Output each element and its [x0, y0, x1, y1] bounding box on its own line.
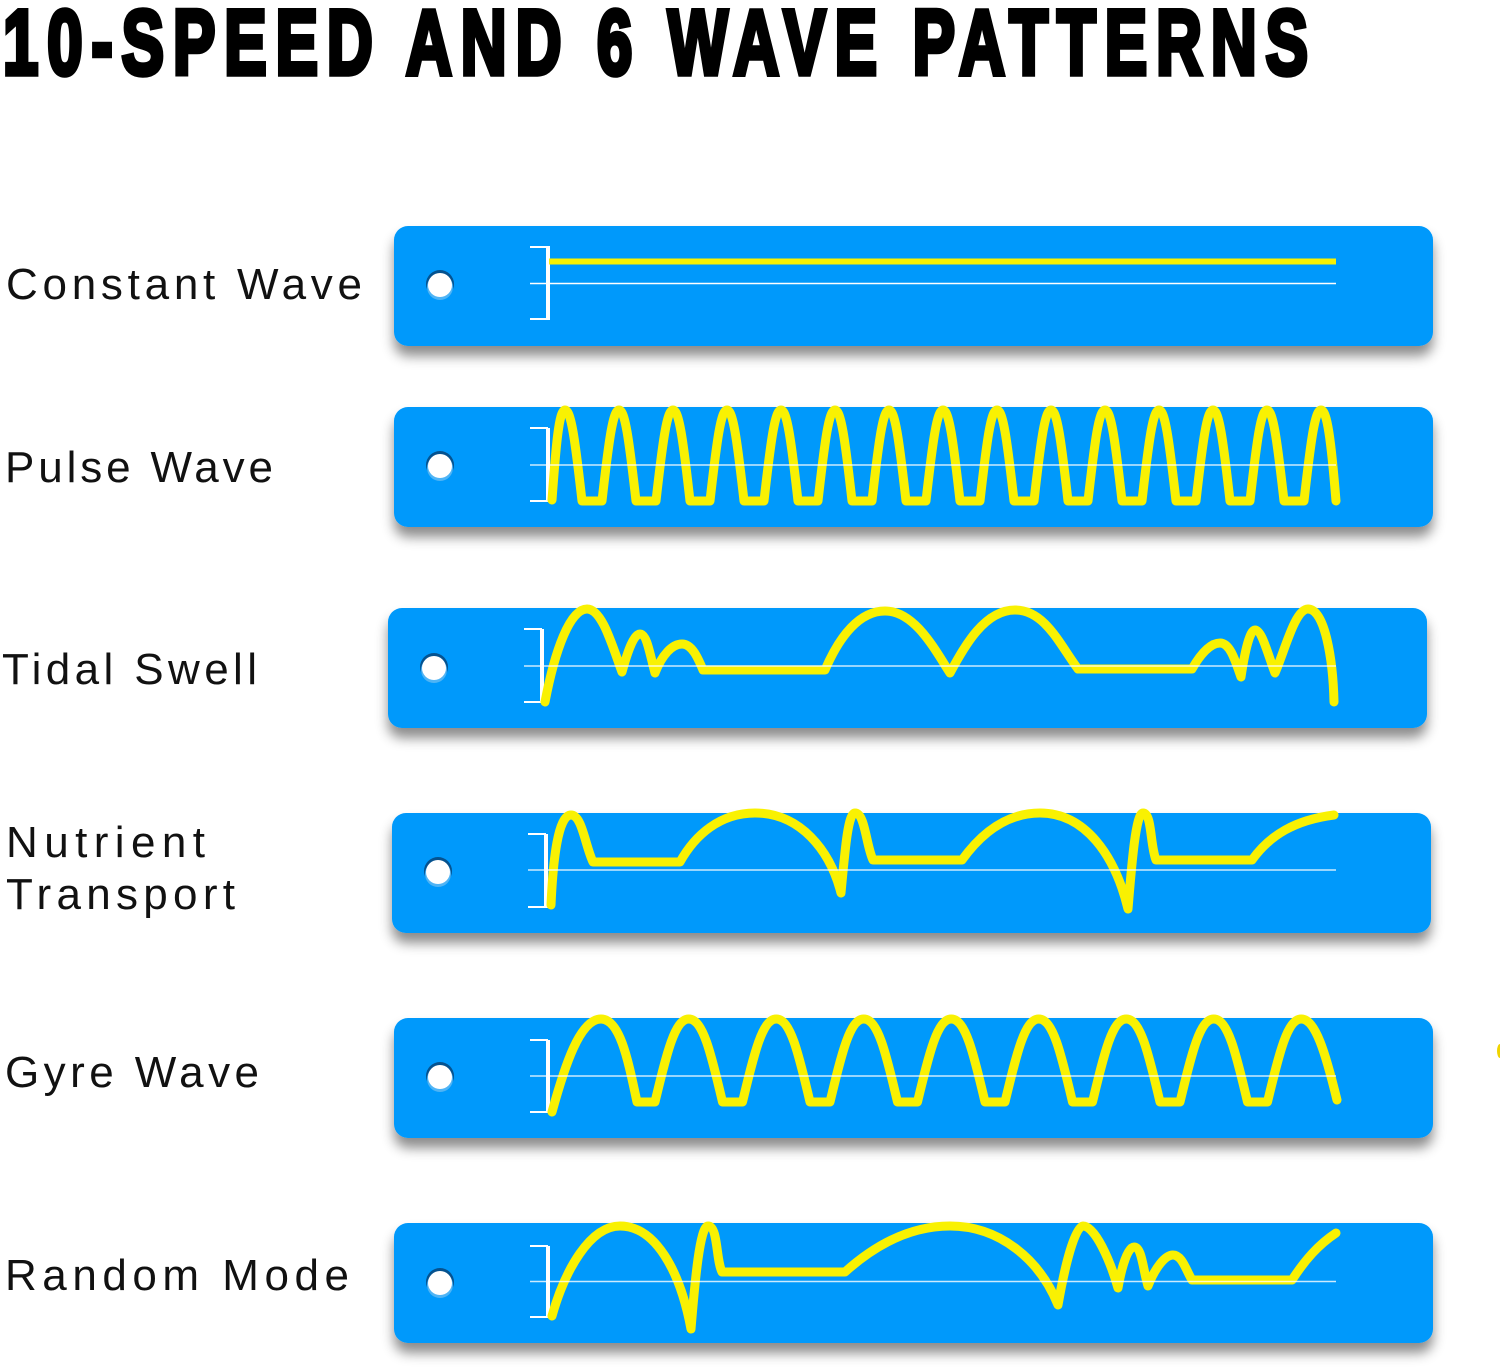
label: pulse wave: Pulse Wave	[5, 443, 273, 492]
bar: gyre wave	[394, 1018, 1433, 1138]
icon: hole	[426, 270, 454, 300]
icon: hole	[420, 653, 448, 683]
wave: tidal swell	[545, 609, 1334, 702]
label: constant wave: Constant Wave	[6, 260, 362, 309]
baseline over wave	[530, 1280, 1336, 1282]
baseline and scale bracket	[530, 1246, 548, 1318]
wave: constant	[549, 258, 1336, 264]
icon: hole	[426, 1062, 454, 1092]
label: nutrient transport: Nutrient	[6, 818, 205, 867]
panel: tidal swell	[2, 608, 1427, 728]
wave: nutrient transport	[551, 813, 1334, 909]
wave: gyre	[552, 1019, 1337, 1112]
panel: pulse wave	[5, 407, 1433, 527]
bar: tidal swell	[388, 608, 1427, 728]
wave: pulse	[552, 410, 1336, 501]
baseline over wave	[530, 464, 1336, 466]
label: tidal swell: Tidal Swell	[2, 645, 257, 694]
bar: constant wave	[394, 226, 1433, 346]
icon: hole	[426, 1268, 454, 1298]
bar: random mode	[394, 1223, 1433, 1343]
baseline and scale bracket	[530, 1040, 548, 1113]
baseline and scale bracket	[524, 629, 542, 703]
stray yellow mark at right edge	[1497, 1044, 1500, 1058]
bar: nutrient transport	[392, 813, 1431, 933]
baseline and scale bracket	[530, 246, 1336, 320]
baseline over wave	[524, 665, 1336, 667]
panel: nutrient transport	[6, 813, 1431, 933]
label: gyre wave: Gyre Wave	[5, 1048, 259, 1097]
panel: constant wave	[6, 226, 1433, 346]
baseline over wave	[530, 1075, 1336, 1077]
panel: random mode	[5, 1223, 1433, 1343]
panel: gyre wave	[5, 1018, 1433, 1138]
baseline over wave	[528, 869, 1336, 871]
label: random mode: Random Mode	[5, 1251, 349, 1300]
baseline and scale bracket	[528, 834, 546, 908]
bar: pulse wave	[394, 407, 1433, 527]
icon: hole	[426, 451, 454, 481]
icon: hole	[424, 857, 452, 887]
label: nutrient transport: Transport	[6, 870, 235, 919]
wave: random mode	[552, 1226, 1336, 1329]
baseline and scale bracket	[530, 428, 548, 502]
